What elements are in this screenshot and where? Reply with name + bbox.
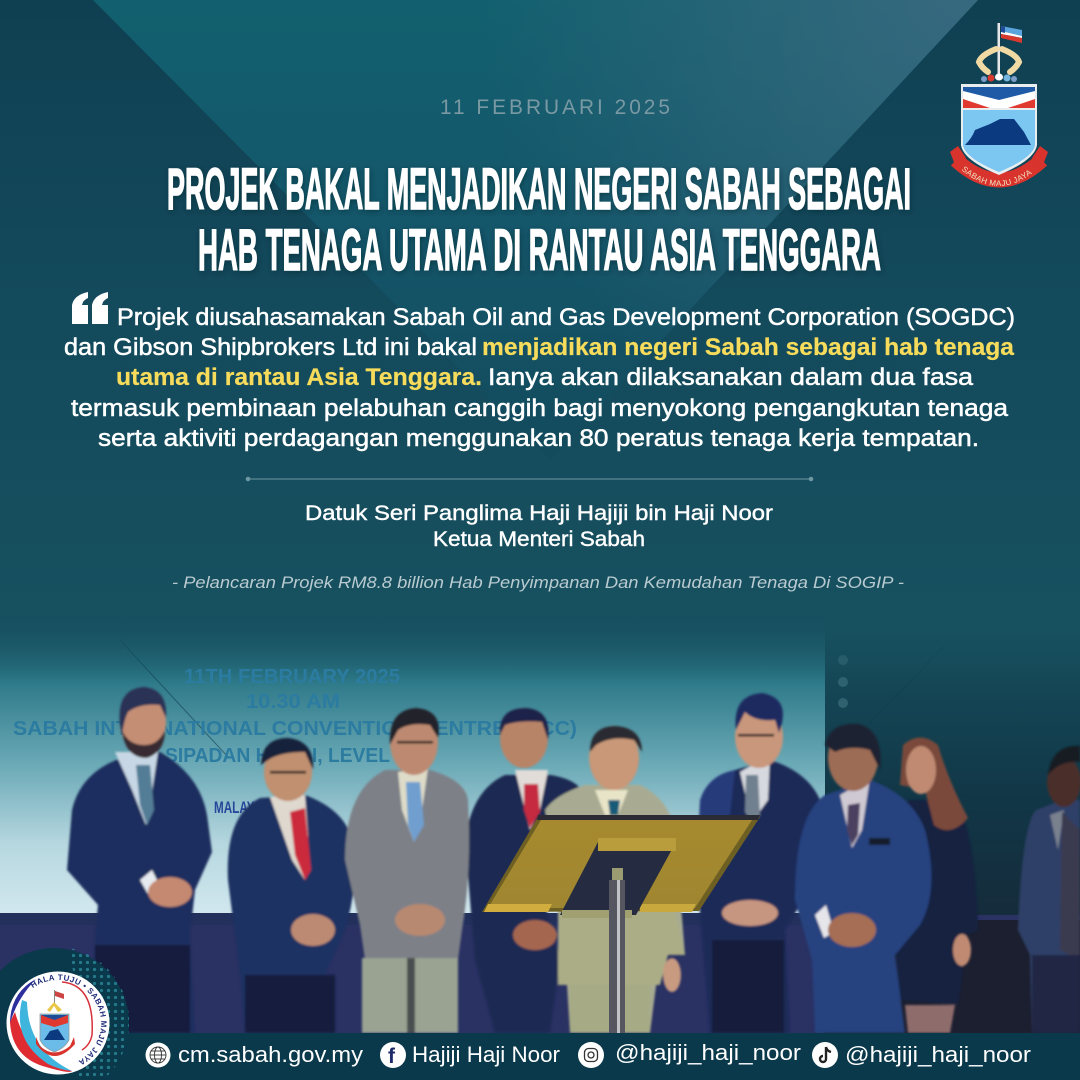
ribbon motto: SABAH MAJU JAYA — [962, 166, 1032, 186]
facebook: f — [388, 1045, 396, 1068]
divider — [246, 477, 813, 481]
icon: quotation mark — [72, 292, 108, 324]
screen text: MALAYSIA — [214, 798, 274, 817]
person 3 grey suit — [345, 708, 469, 1033]
dark backdrop right — [825, 615, 1080, 1035]
quote text: dan Gibson Shipbrokers Ltd ini bakal — [64, 334, 477, 361]
facebook: Hajiji Haji Noor — [412, 1042, 560, 1067]
icon: Sabah crest — [950, 23, 1048, 188]
quote text: termasuk pembinaan pelabuhan canggih bagi menyokong pengangkutan tenaga — [71, 395, 1009, 422]
person 7 blue suit — [795, 724, 931, 1033]
person 9 far right — [1018, 746, 1080, 1033]
stage floor — [0, 915, 1080, 1035]
lectern — [482, 815, 760, 1033]
instagram — [578, 1040, 801, 1068]
person 4 — [465, 708, 585, 1033]
photo fade — [0, 614, 1080, 684]
date: 11 FEBRUARI 2025 — [440, 96, 673, 119]
quote text — [64, 304, 1015, 452]
badge: Hala Tuju Sabah Maju Jaya — [0, 948, 129, 1080]
person 5 beige — [545, 726, 685, 1033]
event caption: - Pelancaran Projek RM8.8 billion Hab Penyimpanan Dan Kemudahan Tenaga Di SOGIP - — [172, 573, 904, 592]
highlighted text: menjadikan negeri Sabah sebagai hab tenaga — [482, 334, 1015, 361]
photo: launch ceremony — [0, 614, 1080, 1035]
badge: Hala Tuju Sabah Maju Jaya: HALA TUJU • SABAH MAJU JAYA — [30, 974, 107, 1064]
person 6 — [696, 693, 820, 1033]
bottom contact bar — [0, 1033, 1080, 1080]
speaker name — [305, 502, 773, 551]
beads — [981, 74, 1017, 82]
screen text — [13, 666, 577, 817]
instagram: @hajiji_haji_noor — [615, 1040, 801, 1065]
people group — [67, 687, 1080, 1033]
stage screen — [0, 615, 825, 920]
screen text: 10.30 AM — [246, 691, 340, 713]
person 8 woman — [890, 738, 978, 1033]
quote text: Ianya akan dilaksanakan dalam dua fasa — [488, 364, 974, 391]
badge swooshes — [10, 979, 72, 1072]
person 2 — [228, 738, 355, 1033]
person 1 — [67, 687, 212, 1033]
small crest — [36, 990, 75, 1056]
ribbon — [950, 146, 1048, 180]
quote text: serta aktiviti perdagangan menggunakan 80 peratus tenaga kerja tempatan. — [98, 425, 979, 452]
highlighted text — [116, 334, 1015, 391]
screen text: SIPADAN HALL I, LEVEL — [165, 745, 390, 767]
website: cm.sabah.gov.my — [178, 1042, 363, 1067]
shield — [961, 84, 1037, 175]
screen text: 11TH FEBRUARY 2025 — [184, 666, 400, 688]
highlighted text: utama di rantau Asia Tenggara. — [116, 364, 482, 391]
speaker name: Datuk Seri Panglima Haji Hajiji bin Haji Noor — [305, 502, 773, 525]
screen text: SABAH INTERNATIONAL CONVENTION CENTRE (SICC) — [13, 718, 577, 740]
flag — [998, 23, 1022, 75]
speaker column lights — [838, 655, 848, 708]
title — [167, 157, 911, 283]
quote text: Projek diusahasamakan Sabah Oil and Gas Development Corporation (SOGDC) — [117, 304, 1015, 331]
speaker name: Ketua Menteri Sabah — [433, 528, 645, 551]
faint diagonal lines — [120, 640, 950, 757]
tiktok: @hajiji_haji_noor — [845, 1042, 1031, 1067]
arms — [979, 49, 1019, 72]
